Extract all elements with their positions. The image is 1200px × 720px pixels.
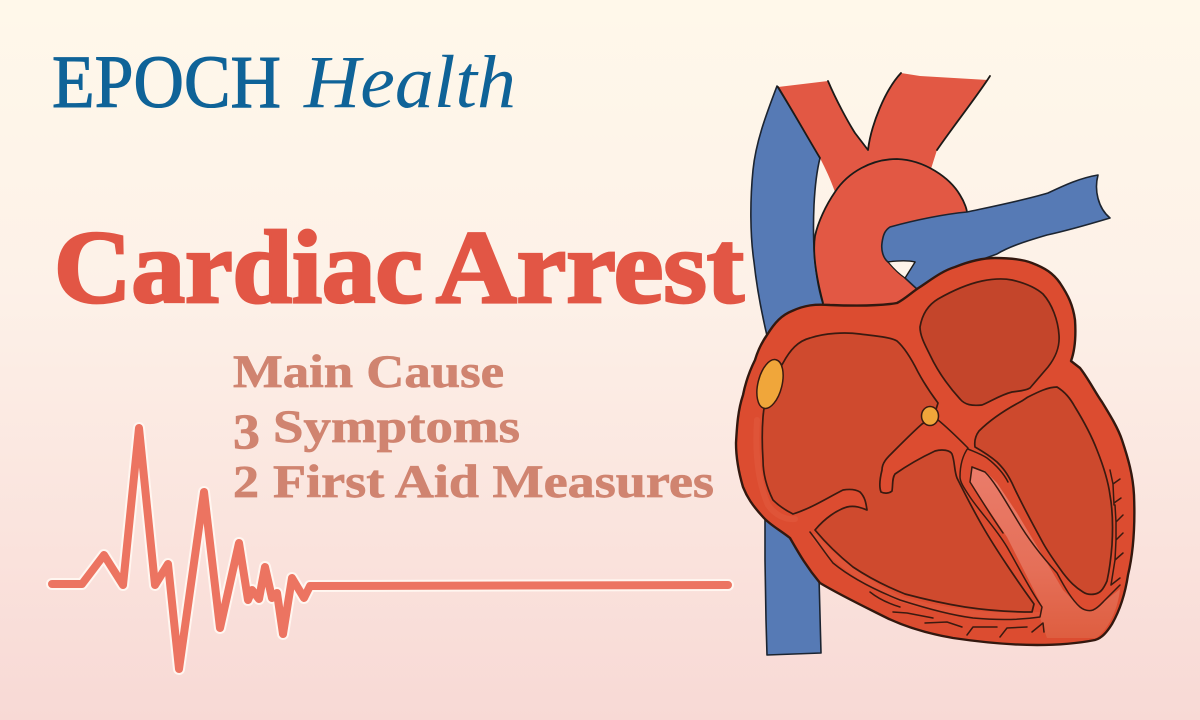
heart illustration [736,73,1134,655]
ECG line [52,428,728,669]
septum outline strokes [810,420,1120,619]
subtitle list: 3 [233,403,260,459]
title: Cardiac [54,210,423,325]
subtitle list: Main Cause [233,346,504,398]
node: atrioventricular [922,406,938,426]
vessel: branching arteries [778,73,988,192]
lighter wall band [756,420,1038,616]
title: Arrest [436,210,744,325]
vessel: inferior vena cava [765,515,821,655]
subtitle list [233,346,714,508]
chamber: left atrium and ventricle [762,333,1034,612]
septum [970,467,1120,638]
purkinje fibres bottom [870,592,1044,637]
chamber: right ventricle [975,387,1113,594]
purkinje fibres right [1110,470,1123,585]
subtitle list: 2 [233,457,259,507]
title [54,210,744,325]
vessel: pulmonary artery [882,175,1110,290]
logo: Epoch Health: EPOCH [52,41,281,124]
subtitle list: First Aid Measures [273,456,714,508]
subtitle list: Symptoms [273,401,520,453]
logo: Epoch Health: Health [303,41,516,124]
chamber: upper right [920,279,1059,405]
vessel: superior vena cava [751,86,825,340]
white gap in pulmonary artery [888,261,915,278]
logo: Epoch Health [52,41,516,124]
heart body [736,258,1134,645]
node: sinoatrial [752,357,788,411]
vessel: aortic arch [814,159,967,306]
